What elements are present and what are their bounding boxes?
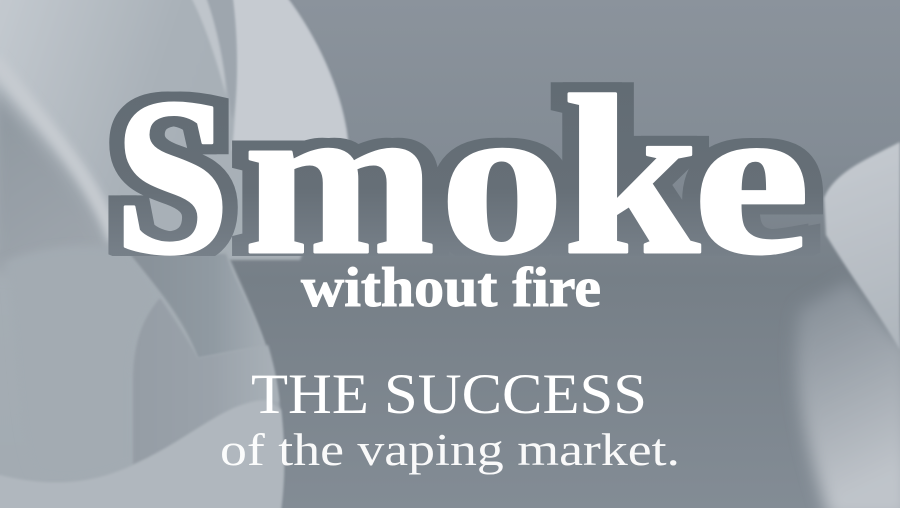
bright narrow fold: [190, 0, 226, 95]
dark central band: [130, 254, 265, 358]
letter fill layer: o: [440, 59, 564, 300]
letter fill layer: k: [563, 50, 700, 302]
letter outline layer: o: [434, 59, 558, 300]
letter fill layer: S: [114, 51, 230, 301]
heading: of the vaping market.: of the vaping market.: [220, 425, 680, 475]
lower veil: [5, 246, 160, 480]
lower smoke mass: [0, 250, 284, 508]
letter fill layer: [114, 50, 810, 302]
main title: Smoke: [108, 82, 823, 256]
mid panel: [133, 298, 279, 465]
letter outline layer: e: [687, 59, 804, 300]
upper smoke mass: [0, 0, 348, 260]
letter fill layer: m: [244, 59, 435, 300]
letter fill layer: e: [693, 59, 810, 300]
letter outline layer: m: [250, 59, 441, 300]
bright veil top right: [232, 0, 348, 150]
letter outline layer: S: [120, 51, 236, 301]
dark narrow fold: [205, 0, 236, 120]
pale wave: [0, 400, 284, 508]
letter outline layer: S: [108, 51, 224, 301]
letter outline layer: m: [238, 59, 429, 300]
dark left fold: [0, 80, 112, 270]
letter outline layer: [108, 82, 823, 256]
smoke: right wedge: [824, 142, 900, 350]
heading: THE SUCCESS: THE SUCCESS: [251, 363, 647, 426]
letter outline layer: k: [557, 50, 694, 302]
letter outline layer: e: [699, 59, 816, 300]
light sweep from left: [0, 60, 115, 240]
smoke: right lower plume: [796, 280, 900, 508]
letter outline layer: k: [569, 50, 706, 302]
letter outline layer: o: [446, 59, 570, 300]
smoke: left swirl: [0, 0, 348, 508]
subtitle: without fire: without fire: [301, 257, 601, 319]
